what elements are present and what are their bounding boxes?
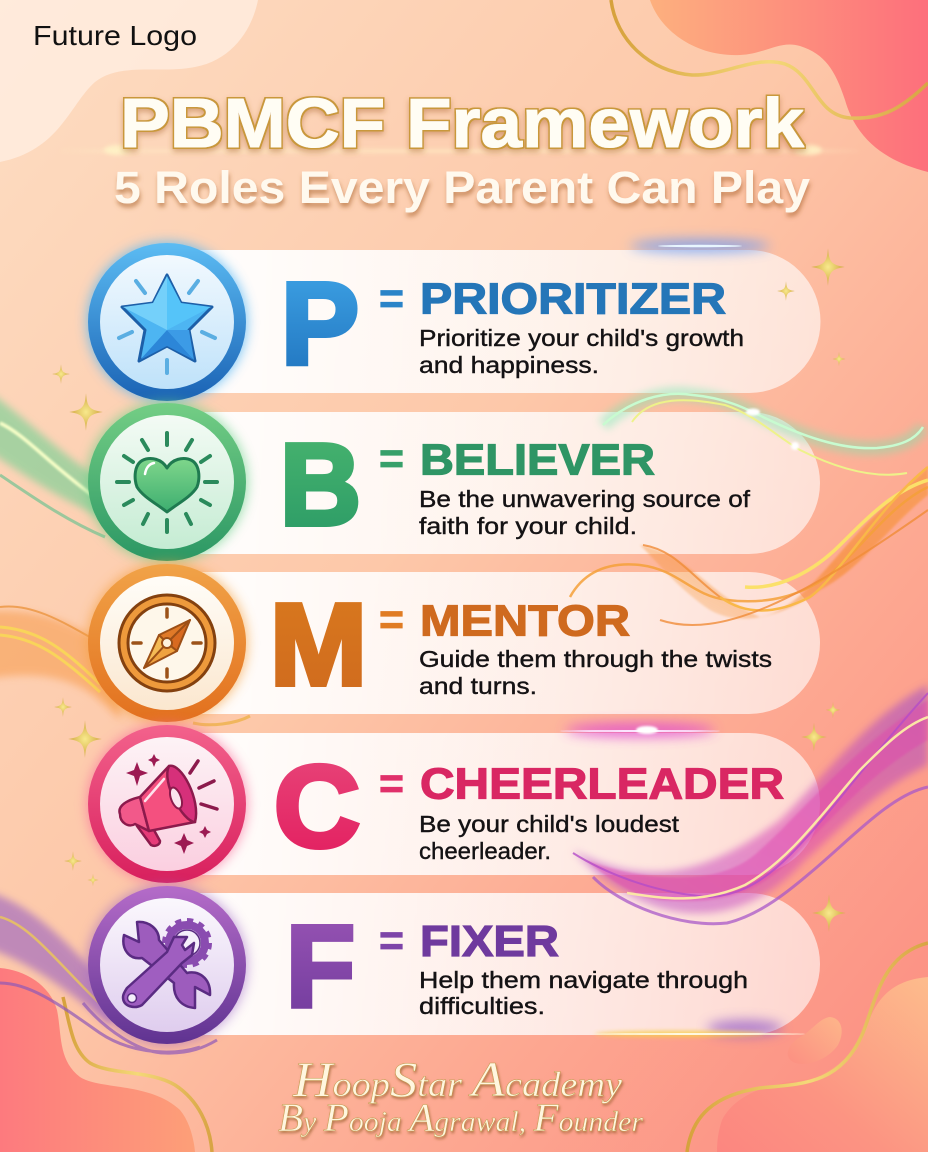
ribbon: green waves [0, 385, 923, 537]
equals sign: = [379, 916, 404, 965]
subtitle: 5 Roles Every Parent Can Play [114, 162, 810, 213]
description: Guide them through the twists [419, 646, 772, 672]
footer founder line: By Pooja Agrawal, Founder [278, 1095, 644, 1140]
footer academy name: HoopStar Academy [292, 1051, 622, 1107]
icon: tools [123, 921, 210, 1008]
badge face [100, 898, 234, 1032]
bottom-right blobs [717, 977, 928, 1152]
badge ring [88, 243, 246, 401]
badge face [100, 737, 234, 871]
badge face [100, 255, 234, 389]
role name: FIXER [420, 917, 559, 966]
blue light streak [630, 239, 770, 253]
title glow [60, 145, 860, 155]
description: Prioritize your child's growth [419, 325, 744, 351]
letter C: C [274, 742, 360, 872]
letter B: B [280, 420, 361, 550]
description: faith for your child. [419, 513, 637, 539]
gold sparkles [52, 248, 846, 932]
role name: PRIORITIZER [420, 274, 726, 324]
badge face [100, 576, 234, 710]
title: PBMCF Framework [120, 84, 804, 162]
equals sign: = [379, 434, 404, 483]
badge glow [87, 242, 247, 402]
gold and violet light streak [595, 1020, 805, 1037]
bottom-left coral blob [0, 968, 195, 1152]
pill: mentor [170, 572, 820, 714]
badge ring [88, 403, 246, 561]
pill: fixer [170, 893, 820, 1035]
panel pills [170, 250, 820, 1035]
row: prioritizer [87, 239, 770, 402]
row: cheerleader [87, 723, 784, 884]
bottom gold lines [63, 943, 928, 1152]
icon: heart [117, 433, 217, 532]
pill: cheerleader [170, 733, 820, 875]
badge ring [88, 725, 246, 883]
icon: megaphone [119, 754, 217, 854]
top-right coral blob [650, 0, 928, 172]
description: Be your child's loudest [419, 811, 680, 837]
ribbon: pink and purple waves [0, 685, 928, 1053]
letter F: F [286, 902, 355, 1032]
letter P: P [281, 258, 359, 388]
pill: prioritizer [170, 250, 820, 393]
badge glow [87, 885, 247, 1045]
role name: BELIEVER [420, 436, 655, 484]
badge glow [87, 402, 247, 562]
top-left cream blob [0, 0, 258, 162]
description: Be the unwavering source of [419, 486, 751, 512]
equals sign: = [379, 595, 404, 644]
equals sign: = [379, 759, 404, 808]
letter M: M [270, 580, 367, 710]
description: and happiness. [419, 352, 599, 378]
ribbon: orange waves [0, 467, 928, 725]
badge face [100, 415, 234, 549]
icon: compass [119, 595, 215, 691]
row: believer [87, 402, 751, 562]
badge glow [87, 563, 247, 723]
badge ring [88, 564, 246, 722]
logo text: Future Logo [33, 20, 197, 51]
badge glow [87, 724, 247, 884]
badge ring [88, 886, 246, 1044]
top-right gold line [611, 0, 928, 118]
equals sign: = [379, 274, 404, 323]
description: difficulties. [419, 993, 545, 1019]
description: and turns. [419, 673, 537, 699]
role name: MENTOR [420, 596, 630, 646]
role name: CHEERLEADER [420, 760, 784, 808]
description: Help them navigate through [419, 967, 748, 993]
icon: star [119, 275, 215, 373]
row: mentor [87, 563, 772, 723]
row: fixer [87, 885, 805, 1045]
pill: believer [170, 412, 820, 554]
magenta light streak [560, 723, 720, 737]
description: cheerleader. [419, 838, 551, 864]
